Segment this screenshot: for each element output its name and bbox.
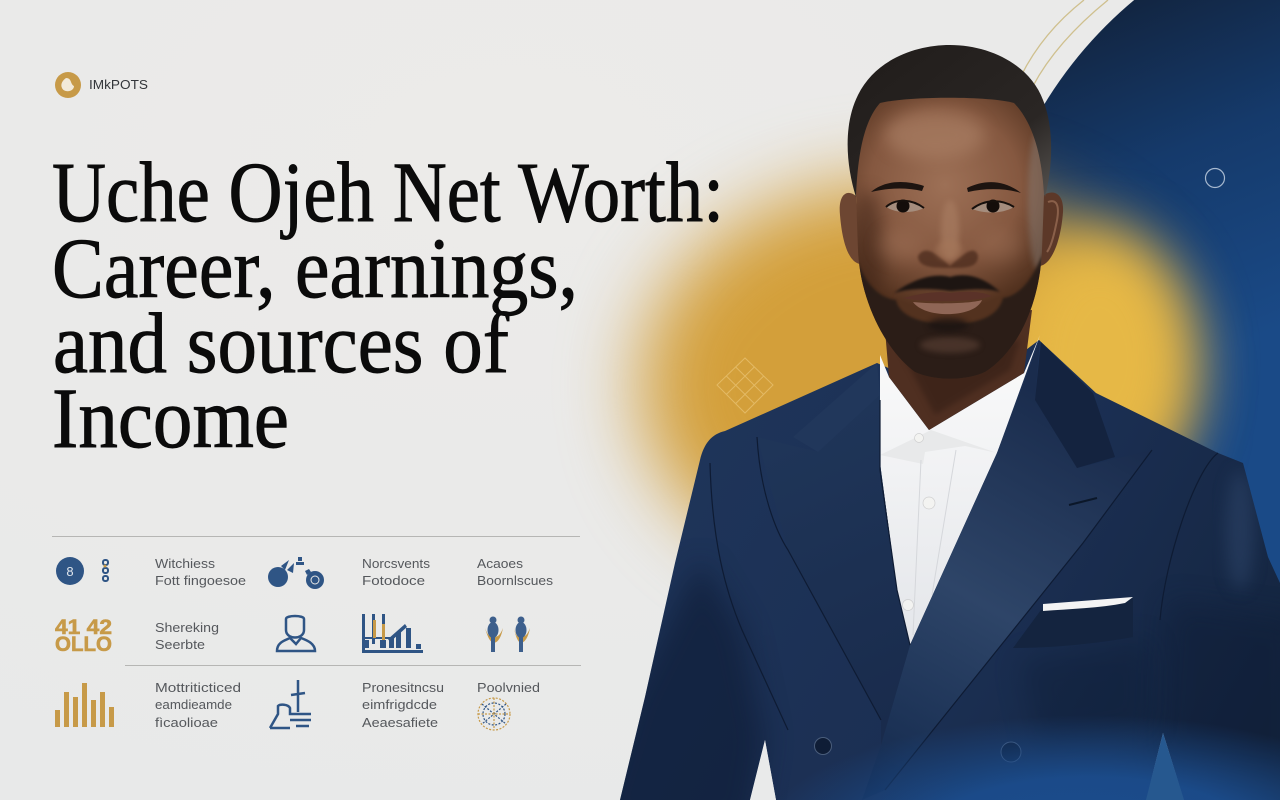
title: Income [52, 370, 289, 466]
small ring [1206, 168, 1224, 188]
icon: gold bar chart [55, 683, 114, 727]
jacket shading [590, 470, 1280, 800]
gold glow [640, 180, 1195, 590]
divider middle [125, 665, 581, 666]
text: row 1 col 3: Boornlscues [477, 573, 554, 588]
pocket [1013, 598, 1133, 648]
face [856, 98, 1044, 379]
beard [859, 256, 1042, 379]
text: row 1 col 1 [155, 556, 246, 588]
text: row 3 col 2 [362, 680, 444, 730]
lapel seams [710, 400, 1218, 790]
icon: linked nodes [268, 557, 324, 589]
text: row 1 col 1: Witchiess [155, 556, 216, 571]
text: row 3 col 3: Poolvnied [477, 680, 540, 695]
mouth [903, 292, 992, 314]
light triangle at lower left [750, 740, 776, 800]
blue circle backdrop [984, 0, 1280, 736]
right collar [1035, 342, 1115, 468]
light triangle at lower right [1146, 733, 1184, 800]
suit jacket [620, 340, 1280, 800]
neck shadow [900, 340, 1020, 415]
text: row 1 col 2: Fotodoce [362, 573, 425, 588]
eyebrows [871, 182, 1021, 193]
text: row 3 col 2: eimfrigdcde [362, 697, 437, 712]
brand badge [55, 72, 148, 98]
badge icon [55, 72, 81, 98]
icon: circle badge and chain: 8 [66, 564, 74, 579]
title: Career, earnings, [52, 220, 578, 316]
icon: gold numerals: OLLO [55, 633, 112, 656]
ears [840, 193, 1063, 266]
left lapel [757, 395, 910, 745]
icon: dotted globe [478, 698, 510, 730]
icon: bar and line chart [362, 614, 423, 653]
divider top [52, 536, 580, 537]
buttonhole [1069, 498, 1097, 505]
hair [848, 45, 1051, 197]
pocket square [1043, 597, 1133, 611]
face shading [852, 111, 1048, 400]
text: row 3 col 2: Pronesitncsu [362, 680, 444, 695]
icon: plant on stand [270, 680, 311, 728]
text: row 3 col 2: Aeaesafiete [362, 715, 438, 730]
text: row 2 col 1 [155, 620, 219, 652]
jacket buttons [814, 738, 1021, 762]
badge label: IMkPOTS [89, 77, 148, 92]
soul patch [928, 318, 968, 332]
text: row 1 col 2: Norcsvents [362, 556, 431, 571]
icon: gold numerals [55, 616, 112, 656]
text: row 1 col 1: Fott fingoesoe [155, 573, 246, 588]
eyes [886, 200, 1014, 213]
diamond lattice ornament [717, 358, 773, 413]
text: row 3 col 1: eamdieamde [155, 697, 232, 712]
collar shade [880, 430, 997, 464]
text: row 3 col 1: Mottriticticed [155, 680, 241, 695]
right lapel [862, 340, 1152, 800]
decorative gold arcs [1021, 0, 1108, 86]
chin skin patch [920, 337, 980, 353]
nose [918, 240, 978, 268]
neck [885, 310, 1032, 430]
shirt [880, 335, 1040, 645]
icon: two figures with gold wings [485, 616, 530, 652]
title [52, 144, 724, 466]
title: and sources of [53, 295, 509, 391]
text: row 3 col 1: fìcaolioae [155, 715, 218, 730]
icon: circle badge and chain [56, 557, 108, 585]
text: row 1 col 2 [362, 556, 431, 588]
portrait [590, 45, 1280, 800]
title: Uche Ojeh Net Worth: [52, 144, 724, 240]
icon: gold numerals: 41 42 [55, 616, 112, 639]
shirt buttons [902, 434, 935, 610]
bottom blue fade [760, 690, 1280, 800]
text: row 1 col 3: Acaoes [477, 556, 524, 571]
mustache [894, 275, 1000, 293]
shirt placket line [913, 450, 956, 635]
text: row 3 col 1 [155, 680, 241, 730]
icon: person bust [277, 616, 315, 651]
text: row 2 col 1: Shereking [155, 620, 219, 635]
left upper collar [793, 363, 880, 452]
text: row 1 col 3 [477, 556, 554, 588]
text: row 2 col 1: Seerbte [155, 637, 205, 652]
